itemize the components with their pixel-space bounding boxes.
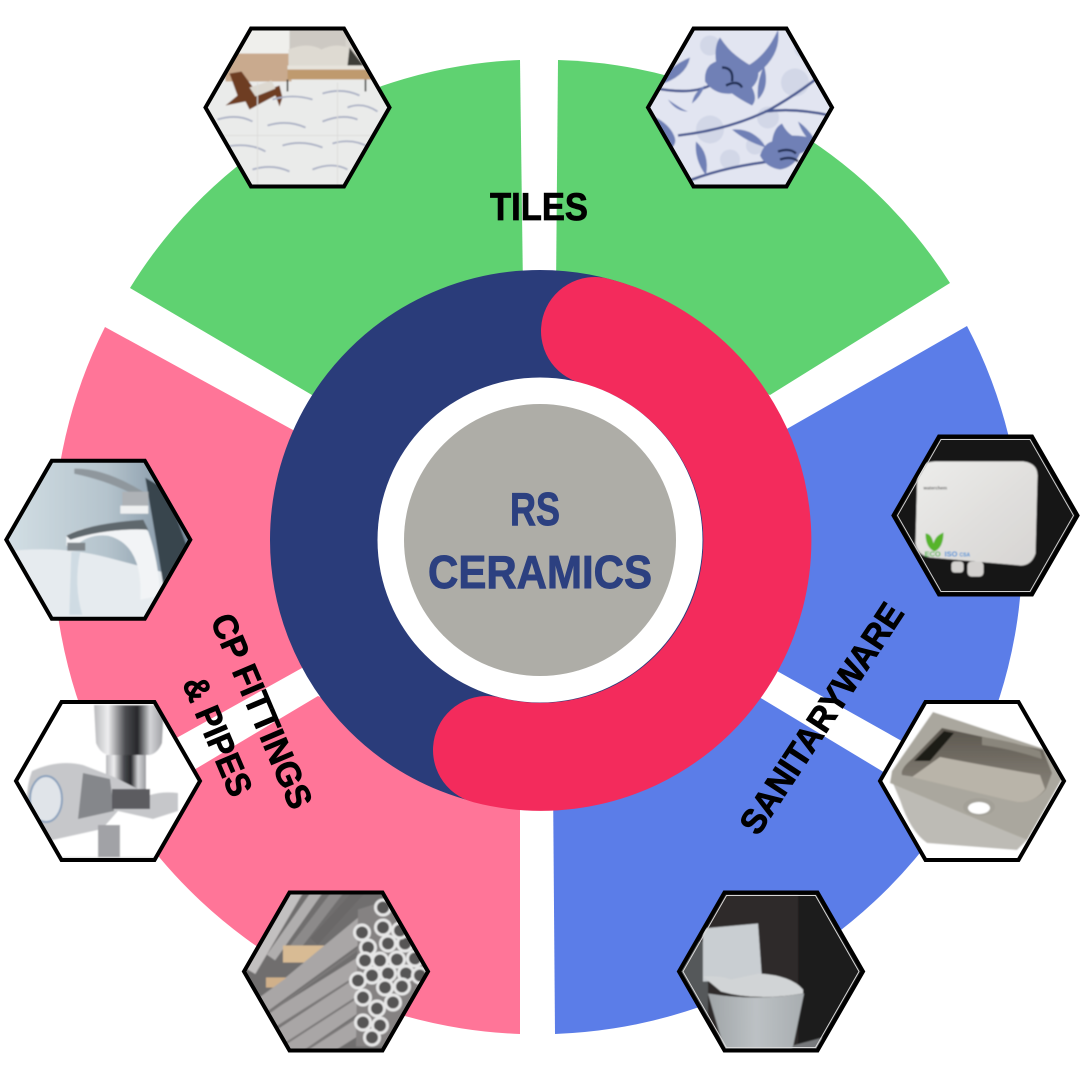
panel: cp fittings sector upper (53, 327, 380, 775)
image hexagon: white cistern: ISO (944, 550, 958, 558)
panel: sanitaryware sector upper (700, 326, 1022, 777)
image hexagon: stacked grey pipes (242, 890, 430, 1052)
image hexagon: white cistern: ECO (924, 550, 941, 558)
image hexagon: steel sink (879, 701, 1065, 861)
panel: sanitaryware sector lower (553, 697, 950, 1034)
image hexagon: floral wall tile (647, 28, 833, 188)
center disc (404, 404, 676, 676)
panel: tiles sector left (130, 60, 523, 395)
panel: tiles sector right (556, 60, 950, 395)
heading: cp fittings and pipes: CP FITTINGS (203, 608, 320, 815)
panel: cp fittings sector lower (125, 696, 520, 1034)
center ring: navy annulus (324, 324, 756, 756)
title: RS Ceramics (428, 483, 652, 598)
image hexagon: basin mixer tap (5, 460, 191, 620)
image hexagon: chrome angle valve (15, 701, 201, 863)
image hexagon: white cistern (892, 436, 1078, 596)
image hexagon: white cistern: CSA (960, 552, 970, 558)
heading: sanitaryware: SANITARYWARE (732, 596, 912, 841)
heading: cp fittings and pipes: & PIPES (175, 671, 260, 802)
title: RS Ceramics: RS (510, 483, 560, 535)
image hexagon: white toilet (678, 892, 868, 1052)
image hexagon: white cistern: waterchem (922, 486, 947, 490)
center ring: red arc (487, 331, 757, 757)
title: RS Ceramics: CERAMICS (428, 546, 652, 598)
center ring: white gap (378, 378, 702, 702)
image hexagon: living room floor tiles (204, 28, 390, 188)
heading: tiles: TILES (490, 186, 588, 229)
